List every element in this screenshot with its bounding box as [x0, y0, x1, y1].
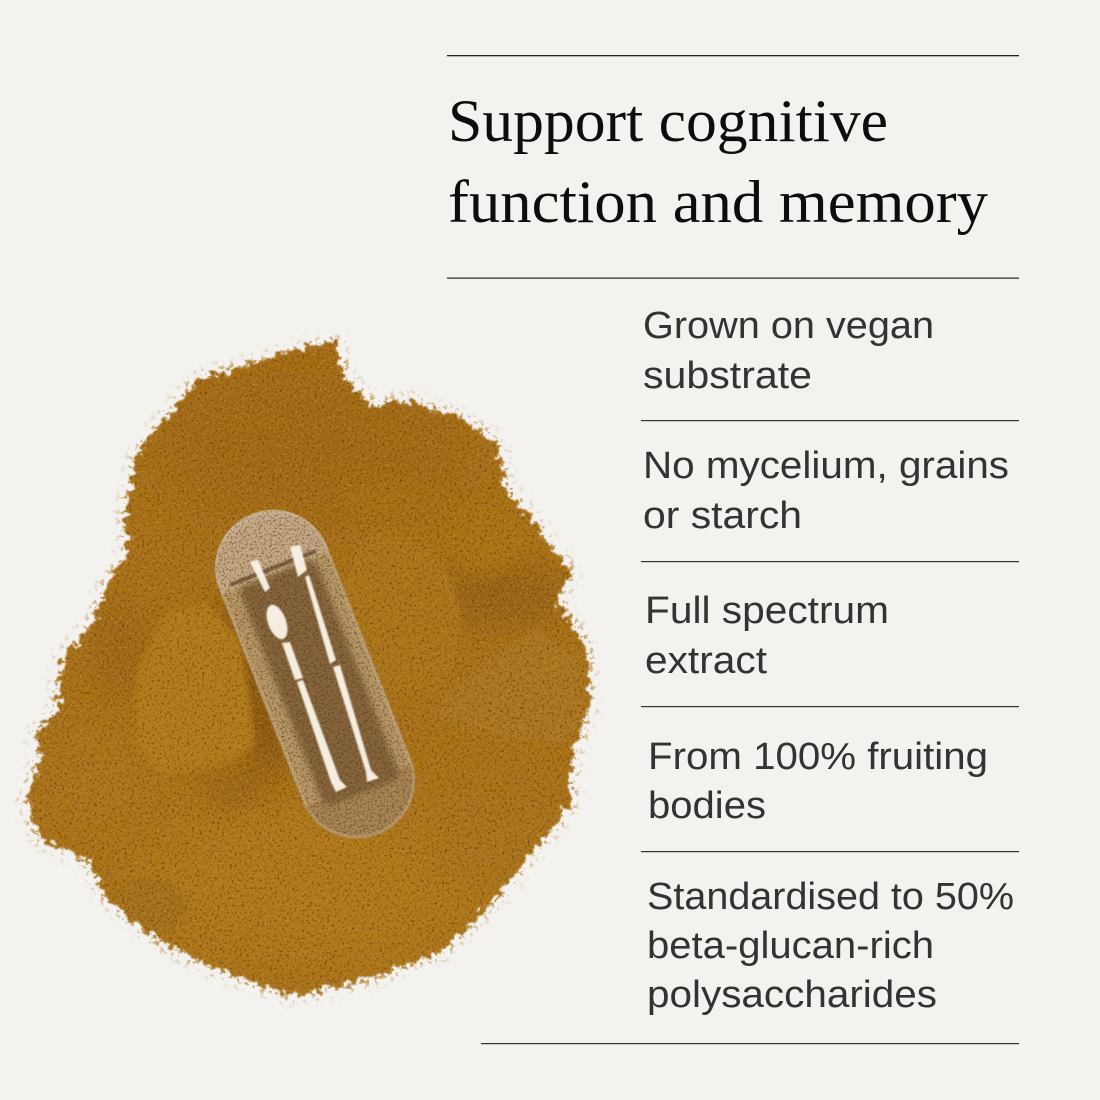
heading rule top	[447, 55, 1019, 56]
lump: far right	[440, 632, 568, 741]
feature: full spectrum	[645, 590, 889, 682]
heading: function and memory	[448, 169, 988, 235]
heading	[448, 88, 988, 235]
powder pile	[24, 338, 593, 999]
lump: top right	[474, 554, 512, 570]
lump: bottom left	[143, 882, 186, 926]
feature: vegan substrate: substrate	[643, 355, 812, 397]
image: powder pile with capsule	[14, 328, 603, 1010]
feature: standardised: Standardised to 50%	[647, 876, 1014, 918]
feature: standardised: polysaccharides	[647, 974, 937, 1016]
feature: standardised: beta-glucan-rich	[647, 925, 934, 967]
feature: fruiting bodies: bodies	[648, 785, 766, 827]
feature: no mycelium: or starch	[643, 495, 802, 537]
shadows and creases	[453, 566, 560, 627]
feature: no mycelium	[643, 445, 1009, 537]
heading: Support cognitive	[448, 88, 888, 154]
feature: no mycelium: No mycelium, grains	[643, 445, 1009, 487]
feature: full spectrum: extract	[645, 640, 767, 682]
feature: vegan substrate	[643, 305, 934, 397]
capsule	[214, 509, 416, 839]
capsule highlights	[250, 545, 379, 792]
lump: left	[135, 600, 255, 775]
feature: standardised	[647, 876, 1014, 1016]
feature: full spectrum: Full spectrum	[645, 590, 889, 632]
powder dust	[14, 328, 603, 1010]
lump: centre right	[370, 544, 459, 632]
feature: vegan substrate: Grown on vegan	[643, 305, 934, 347]
heading rule bottom	[447, 278, 1019, 279]
powder grain	[27, 340, 591, 998]
feature: fruiting bodies	[648, 736, 988, 827]
feature: fruiting bodies: From 100% fruiting	[648, 736, 988, 778]
